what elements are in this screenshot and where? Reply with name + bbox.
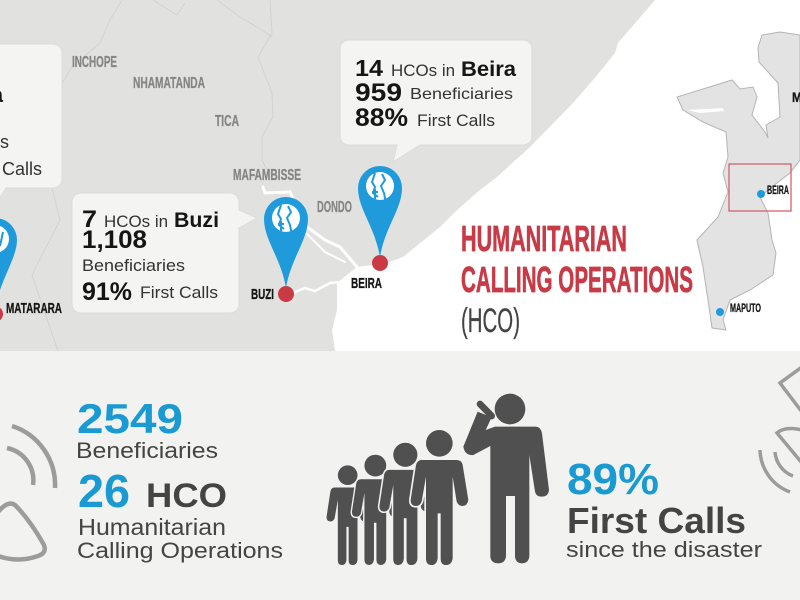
town labels: MATARARA [6,300,62,317]
stat: 2549 beneficiaries: Beneficiaries [76,438,218,463]
icon: Buzi map pin [264,197,308,302]
heading: Humanitarian Calling Operations: (HCO) [461,302,520,340]
callout: Buzi: Beneficiaries [82,256,185,275]
panel: regional map [0,0,800,351]
icon: queue of people with person on the phone [327,394,549,565]
locator map: Mozambique [677,32,800,330]
town labels: TICA [215,113,239,130]
icon: left phone with signal [0,426,55,560]
callout: left location, cropped: Calls [2,159,42,179]
icon: Beira map pin [358,166,402,271]
heading: Humanitarian Calling Operations [461,218,693,340]
callout: Beira: First Calls [417,111,495,130]
callout: Beira [340,40,532,162]
callout: Beira: Beira [461,58,516,81]
stat: 89% first calls [566,455,762,562]
callout: Beira: 14 [355,55,383,81]
callout: Buzi: 1,108 [82,226,147,254]
stat: 26 HCO: 26 [78,465,130,517]
panel: summary statistics [0,351,800,600]
town labels: BUZI [251,286,274,303]
stat: 26 HCO: Humanitarian [78,514,226,540]
locator map: Mozambique: MAPUTO [730,301,761,315]
town labels: MAFAMBISSE [233,167,301,184]
callout: Buzi: First Calls [140,283,218,302]
stat: 89% first calls: First Calls [567,500,746,541]
stat: 26 HCO [77,465,283,563]
town labels: NHAMATANDA [133,75,205,92]
town labels: DONDO [317,199,352,216]
callout: Buzi: HCOs in [104,212,168,231]
callout: Buzi [72,193,257,313]
callout: Beira: HCOs in [391,61,455,80]
stat: 89% first calls: since the disaster [566,537,762,562]
callout: Buzi: 91% [82,278,132,306]
stat: 2549 beneficiaries: 2549 [77,395,183,442]
callout: Beira: 88% [355,104,408,132]
icon: left map pin [0,218,17,322]
callout: Buzi: 7 [82,206,97,233]
callout: Beira: 959 [355,79,402,107]
stat: 26 HCO: HCO [146,477,227,515]
stat: 2549 beneficiaries [76,395,218,463]
town labels: BEIRA [351,275,382,292]
stat: 89% first calls: 89% [567,455,659,504]
town labels: INCHOPE [72,54,117,71]
town labels [6,54,382,317]
callout: Beira: Beneficiaries [410,86,513,103]
heading: Humanitarian Calling Operations: HUMANITARIAN [461,218,627,259]
stat: 26 HCO: Calling Operations [77,538,283,563]
callout: Buzi: Buzi [174,209,219,232]
icon: right phone with signal [760,367,800,492]
callout: left location, cropped: s [0,132,9,152]
callout: left location, cropped [0,44,62,204]
